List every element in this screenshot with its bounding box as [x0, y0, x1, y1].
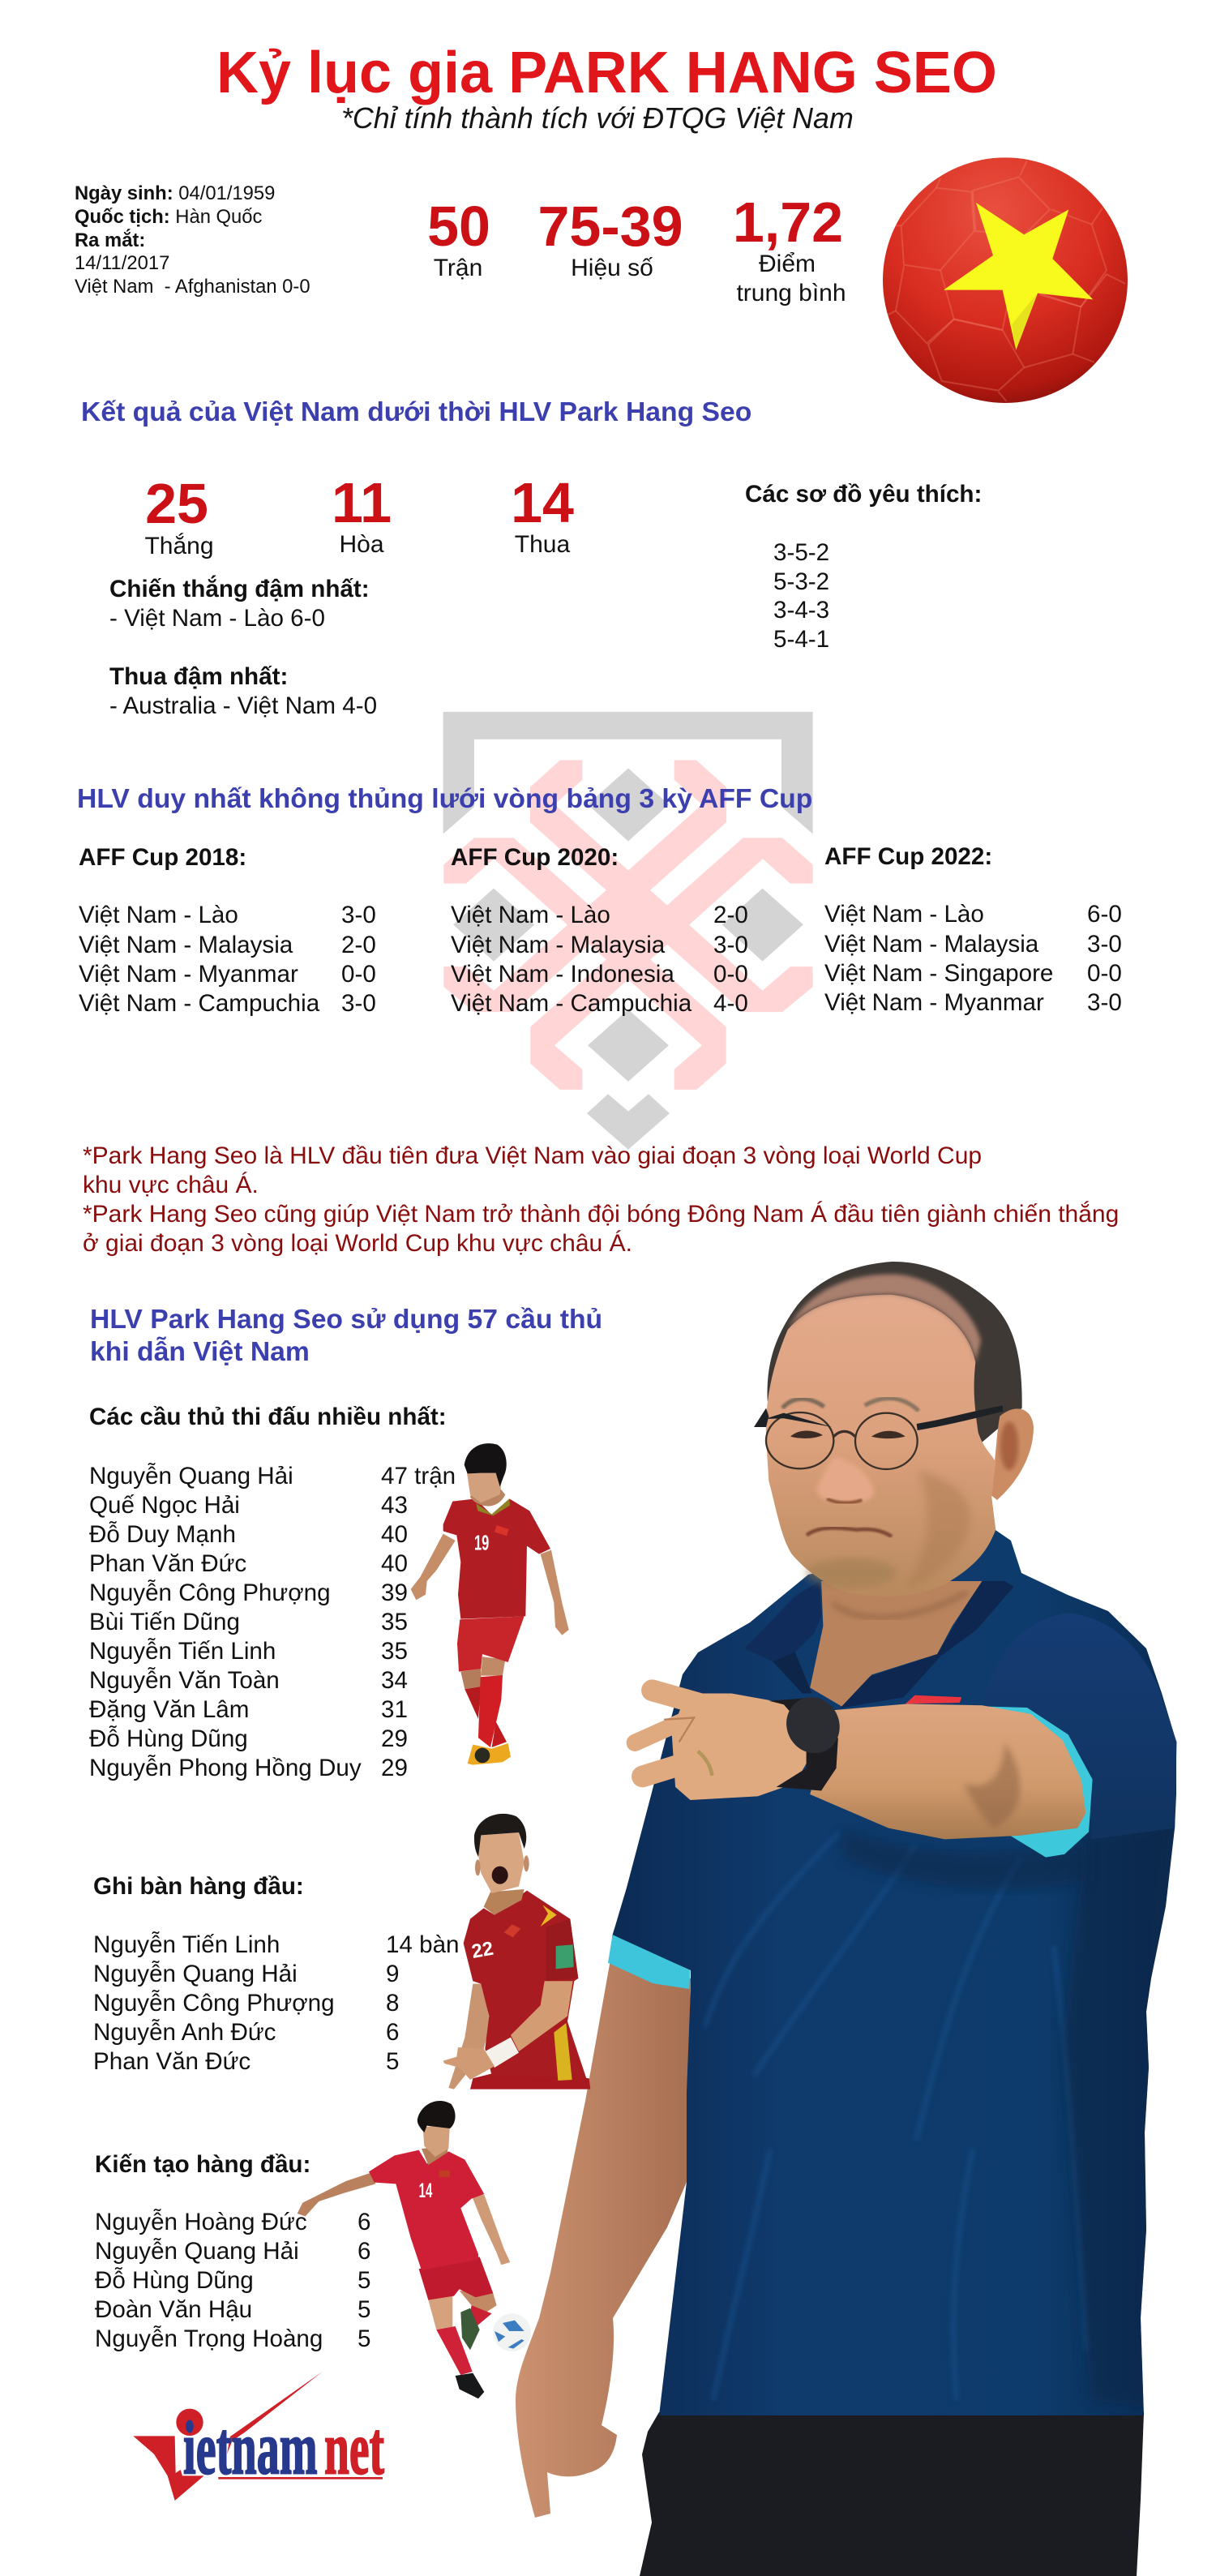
stat: matches: Trận: [434, 255, 482, 281]
list: top assists: 6: [358, 2238, 370, 2265]
flag crest on shirt: [906, 1695, 961, 1704]
notes: World Cup qualifying: *Park Hang Seo cũng giúp Việt Nam trở thành đội bóng Đông Nam Á đầu tiên giành chiến thắng: [83, 1201, 1119, 1228]
table: AFF Cup 2018: 0-0: [341, 961, 376, 988]
stat: losses: 14: [511, 471, 574, 534]
table: AFF Cup 2020: Việt Nam - Campuchia: [451, 990, 692, 1017]
table: AFF Cup 2018: 2-0: [341, 932, 376, 958]
list: most appearances: [89, 1404, 456, 1781]
table: AFF Cup 2020: 2-0: [713, 902, 748, 928]
forearm, hand and watch: [635, 1688, 1085, 1839]
shirt body: [612, 1530, 1176, 2415]
list: most appearances: 29: [381, 1725, 408, 1752]
list: most appearances: Bùi Tiến Dũng: [89, 1609, 240, 1635]
coach info block: Việt Nam - Afghanistan 0-0: [75, 276, 310, 298]
biggest win and loss: Thua đậm nhất:: [109, 663, 288, 690]
table: AFF Cup 2020: [451, 844, 748, 1017]
stat: draws: Hòa: [339, 531, 384, 558]
list: most appearances: Nguyễn Văn Toàn: [89, 1667, 280, 1694]
list: top scorers: 6: [386, 2019, 399, 2046]
stat: goal difference: 75-39: [537, 195, 683, 258]
player photo: number 19: [411, 1443, 569, 1765]
notes: World Cup qualifying: ở giai đoạn 3 vòng loại World Cup khu vực châu Á.: [83, 1230, 632, 1257]
stat: average points: 1,72: [733, 191, 843, 254]
list: most appearances: Đỗ Hùng Dũng: [89, 1725, 248, 1752]
list: most appearances: Nguyễn Phong Hồng Duy: [89, 1755, 362, 1781]
favourite formations: 3-4-3: [773, 597, 829, 624]
list: top assists: Đoàn Văn Hậu: [95, 2296, 252, 2323]
list: most appearances: 40: [381, 1550, 408, 1577]
table: AFF Cup 2020: 4-0: [713, 990, 748, 1017]
table: AFF Cup 2020: Việt Nam - Indonesia: [451, 961, 674, 988]
list: most appearances: Nguyễn Tiến Linh: [89, 1638, 276, 1665]
list: top scorers: 8: [386, 1990, 399, 2017]
list: top scorers: Nguyễn Anh Đức: [93, 2019, 276, 2046]
logo: VietNamNet: net: [324, 2407, 384, 2491]
table: AFF Cup 2022: Việt Nam - Singapore: [824, 960, 1053, 987]
table: AFF Cup 2022: 6-0: [1087, 901, 1122, 928]
stat: draws: 11: [332, 471, 392, 534]
table: AFF Cup 2018: 3-0: [341, 902, 376, 928]
list: top assists: Đỗ Hùng Dũng: [95, 2267, 254, 2294]
player photo: number 22: [443, 1814, 590, 2090]
stat: losses: Thua: [515, 531, 570, 558]
list: top assists: Nguyễn Trọng Hoàng: [95, 2325, 323, 2352]
list: top assists: Kiến tạo hàng đầu:: [95, 2151, 310, 2178]
table: AFF Cup 2022: 3-0: [1087, 989, 1122, 1016]
biggest win and loss: Chiến thắng đậm nhất:: [109, 575, 370, 602]
icon: AFF Cup logo watermark: [443, 712, 813, 1150]
list: top assists: 5: [358, 2267, 370, 2294]
list: top assists: 5: [358, 2325, 370, 2352]
list: most appearances: 39: [381, 1579, 408, 1606]
stat: goal difference: Hiệu số: [571, 255, 653, 281]
collar: [744, 1581, 821, 1661]
list: most appearances: Đặng Văn Lâm: [89, 1696, 249, 1723]
list: most appearances: Nguyễn Công Phượng: [89, 1579, 331, 1606]
heading: AFF Cup record: HLV duy nhất không thủng lưới vòng bảng 3 kỳ AFF Cup: [77, 783, 812, 814]
stat: average points: Điểm: [759, 251, 816, 277]
logo: VietNamNet: [133, 2372, 384, 2501]
coach photo illustration: [516, 1262, 1176, 2576]
list: most appearances: 31: [381, 1696, 408, 1723]
coach info block: [75, 182, 310, 298]
list: top scorers: Nguyễn Công Phượng: [93, 1990, 335, 2017]
coach info block: 14/11/2017: [75, 252, 169, 274]
table: AFF Cup 2022: [824, 843, 1122, 1016]
stat: average points: trung bình: [736, 280, 846, 306]
heading: results: Kết quả của Việt Nam dưới thời HLV Park Hang Seo: [81, 396, 751, 427]
player photo: number 22: 22: [470, 1938, 495, 1963]
face: [766, 1295, 995, 1597]
list: most appearances: Nguyễn Quang Hải: [89, 1463, 293, 1489]
notes: World Cup qualifying: *Park Hang Seo là HLV đầu tiên đưa Việt Nam vào giai đoạn 3 vòng loại World Cup: [83, 1142, 982, 1169]
list: top scorers: Ghi bàn hàng đầu:: [93, 1873, 304, 1900]
stat: average points: [733, 191, 846, 306]
heading: 57 players used: [90, 1304, 602, 1367]
favourite formations: [745, 481, 982, 653]
table: AFF Cup 2018: Việt Nam - Campuchia: [79, 990, 320, 1017]
head: [754, 1262, 1034, 1597]
ear: [991, 1408, 1034, 1500]
heading: 57 players used: khi dẫn Việt Nam: [90, 1336, 310, 1367]
table: AFF Cup 2020: AFF Cup 2020:: [451, 844, 619, 871]
stat: wins: 25: [145, 472, 208, 535]
list: most appearances: Các cầu thủ thi đấu nhiều nhất:: [89, 1404, 447, 1430]
mouth: [807, 1528, 892, 1537]
table: AFF Cup 2020: 0-0: [713, 961, 748, 988]
table: AFF Cup 2022: Việt Nam - Lào: [824, 901, 984, 928]
list: top assists: Nguyễn Hoàng Đức: [95, 2209, 307, 2235]
table: AFF Cup 2022: Việt Nam - Malaysia: [824, 931, 1039, 958]
favourite formations: 5-4-1: [773, 626, 829, 653]
list: top scorers: Phan Văn Đức: [93, 2048, 250, 2075]
stat: matches: 50: [427, 195, 490, 258]
list: top scorers: [93, 1873, 460, 2075]
table: AFF Cup 2022: 0-0: [1087, 960, 1122, 987]
face shading: [906, 1470, 970, 1589]
table: AFF Cup 2020: 3-0: [713, 932, 748, 958]
table: AFF Cup 2018: Việt Nam - Lào: [79, 902, 238, 928]
thinning hair: [788, 1275, 981, 1362]
list: most appearances: Quế Ngọc Hải: [89, 1492, 240, 1519]
list: most appearances: 29: [381, 1755, 408, 1781]
coach info block: Quốc tịch: Hàn Quốc: [75, 206, 263, 228]
biggest win and loss: - Australia - Việt Nam 4-0: [109, 692, 377, 719]
nose: [816, 1457, 874, 1503]
list: top assists: 5: [358, 2296, 370, 2323]
neck: [810, 1581, 983, 1707]
eyebrows: [782, 1399, 824, 1408]
list: most appearances: 35: [381, 1609, 408, 1635]
icon: Vietnam flag football: [883, 157, 1128, 403]
table: AFF Cup 2018: [79, 844, 376, 1017]
table: AFF Cup 2018: AFF Cup 2018:: [79, 844, 246, 871]
list: most appearances: 43: [381, 1492, 408, 1519]
stat: wins: Thắng: [144, 533, 214, 559]
table: AFF Cup 2018: Việt Nam - Myanmar: [79, 961, 298, 988]
list: most appearances: 35: [381, 1638, 408, 1665]
list: most appearances: 40: [381, 1521, 408, 1548]
list: most appearances: 47 trận: [381, 1463, 456, 1489]
wristwatch: [769, 1698, 838, 1790]
list: top scorers: 14 bàn: [386, 1931, 460, 1958]
list: most appearances: Đỗ Duy Mạnh: [89, 1521, 236, 1548]
biggest win and loss: - Việt Nam - Lào 6-0: [109, 605, 325, 632]
biggest win and loss: [109, 575, 377, 719]
favourite formations: 5-3-2: [773, 568, 829, 595]
list: top assists: [95, 2151, 370, 2352]
hand: [635, 1691, 709, 1777]
shorts: [640, 2412, 1144, 2576]
logo: VietNamNet: ietnam: [183, 2407, 318, 2491]
list: top scorers: 5: [386, 2048, 399, 2075]
player photo: number 19: 19: [474, 1531, 489, 1555]
table: AFF Cup 2022: AFF Cup 2022:: [824, 843, 992, 870]
list: top assists: 6: [358, 2209, 370, 2235]
list: top scorers: Nguyễn Tiến Linh: [93, 1931, 280, 1958]
lower left arm: [516, 1946, 691, 2518]
heading: 57 players used: HLV Park Hang Seo sử dụng 57 cầu thủ: [90, 1304, 602, 1335]
glasses: [766, 1412, 918, 1469]
hair: [768, 1262, 1022, 1443]
list: top assists: Nguyễn Quang Hải: [95, 2238, 299, 2265]
eyes: [790, 1431, 823, 1438]
list: most appearances: Phan Văn Đức: [89, 1550, 246, 1577]
favourite formations: 3-5-2: [773, 539, 829, 566]
list: top scorers: 9: [386, 1961, 399, 1987]
player photo: number 14: 14: [419, 2180, 432, 2202]
coach info block: Ngày sinh: 04/01/1959: [75, 182, 275, 204]
table: AFF Cup 2018: 3-0: [341, 990, 376, 1017]
notes: World Cup qualifying: khu vực châu Á.: [83, 1172, 259, 1198]
notes: World Cup qualifying: [83, 1142, 1119, 1257]
shirt folds and shading: [705, 1816, 1175, 2408]
forearm: [810, 1704, 1085, 1839]
table: AFF Cup 2022: Việt Nam - Myanmar: [824, 989, 1044, 1016]
cyan sleeve band: [987, 1707, 1093, 1858]
right sleeve: [608, 1581, 1176, 1989]
left sleeve cyan cuff: [608, 1935, 691, 1989]
player photo: number 14: [298, 2101, 531, 2398]
title: Kỷ lục gia PARK HANG SEO: [216, 41, 997, 105]
subtitle: *Chỉ tính thành tích với ĐTQG Việt Nam: [341, 102, 854, 135]
stat: wins: [144, 472, 214, 559]
favourite formations: Các sơ đồ yêu thích:: [745, 481, 982, 508]
table: AFF Cup 2022: 3-0: [1087, 931, 1122, 958]
coach info block: Ra mắt:: [75, 229, 145, 251]
table: AFF Cup 2020: Việt Nam - Malaysia: [451, 932, 666, 958]
table: AFF Cup 2018: Việt Nam - Malaysia: [79, 932, 293, 958]
table: AFF Cup 2020: Việt Nam - Lào: [451, 902, 610, 928]
list: top scorers: Nguyễn Quang Hải: [93, 1961, 298, 1987]
list: most appearances: 34: [381, 1667, 408, 1694]
